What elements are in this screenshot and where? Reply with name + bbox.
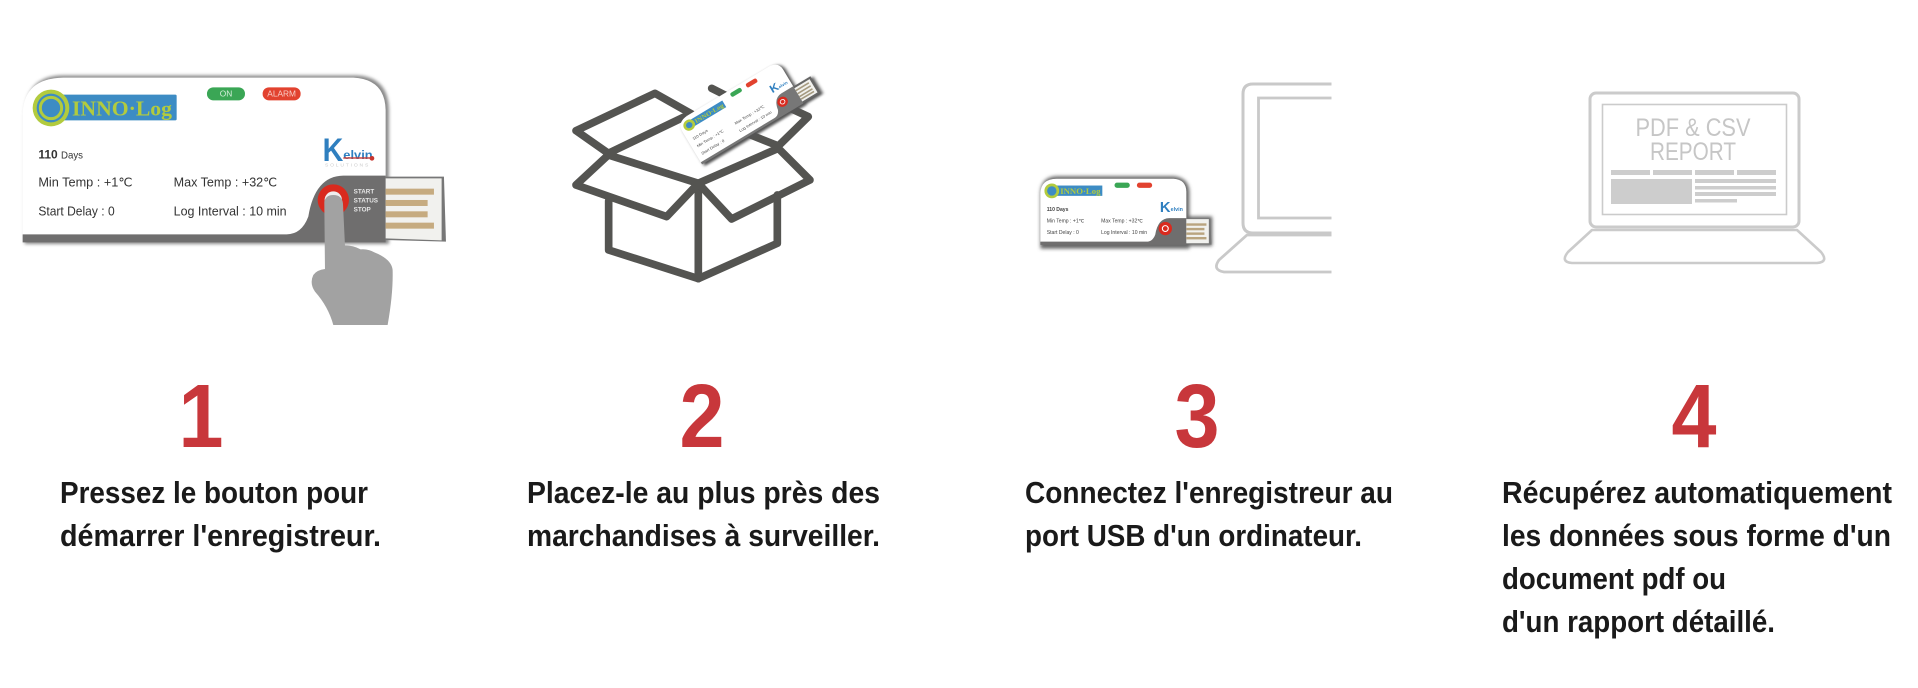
icon: hand — [312, 195, 393, 325]
step 2 number: 2 — [680, 367, 724, 467]
step 3 text: port USB d'un ordinateur. — [1025, 518, 1362, 553]
logger card, tilted: INNO·Log — [694, 102, 726, 125]
Kelvin logo: SOLUTIONS — [325, 163, 369, 169]
logger card: Log Interval : 10 min — [1101, 230, 1147, 236]
panel: step 3 illustration, logger and laptop — [1040, 84, 1332, 272]
step 4 text: Récupérez automatiquement — [1502, 475, 1892, 510]
step 1 number: 1 — [178, 367, 224, 467]
logger settings text: 110 Days — [38, 147, 83, 161]
logger settings text: Log Interval : 10 min — [174, 205, 287, 219]
step 4 number: 4 — [1672, 367, 1716, 467]
ON indicator: ON — [220, 89, 232, 99]
icon: cardboard box — [576, 88, 810, 279]
logger settings text: Min Temp : +1℃ — [38, 176, 133, 190]
logger card, tilted: K — [768, 81, 782, 96]
logger card — [1040, 176, 1212, 249]
step 3 number: 3 — [1174, 367, 1220, 467]
panel: step 2 illustration, open box with logger — [576, 50, 824, 279]
logger settings text: Max Temp : +32℃ — [174, 176, 277, 190]
panel: step 4 illustration, laptop with report — [1565, 93, 1824, 263]
icon: laptop — [1565, 93, 1824, 263]
power button — [318, 184, 349, 216]
logo — [33, 90, 177, 126]
logger card: INNO·Log — [1060, 187, 1101, 196]
logger card, tilted: elvin — [778, 80, 789, 89]
logger card, tilted — [677, 50, 824, 167]
Kelvin logo — [323, 132, 374, 169]
report title: PDF & CSV — [1636, 114, 1751, 142]
logger settings text: Start Delay : 0 — [38, 205, 115, 219]
ALARM indicator — [263, 87, 301, 100]
ON indicator — [207, 87, 245, 100]
step 4 text: document pdf ou — [1502, 561, 1726, 596]
logger card, tilted: Start Delay : 0 — [700, 138, 726, 156]
step 3 text: Connectez l'enregistreur au — [1025, 475, 1393, 510]
report title: REPORT — [1650, 138, 1736, 166]
Kelvin logo: K — [323, 132, 343, 168]
logger card: 110 Days — [1047, 207, 1069, 213]
card shadow — [25, 75, 389, 244]
step 4 text: les données sous forme d'un — [1502, 518, 1891, 553]
logger card, tilted: Max Temp : +32℃ — [734, 104, 766, 126]
step 1 text: démarrer l'enregistreur. — [60, 518, 381, 553]
report content blocks — [1611, 170, 1776, 204]
logger card, tilted: 110 Days — [691, 128, 709, 141]
button labels — [354, 188, 378, 214]
step 4 text: d'un rapport détaillé. — [1502, 604, 1775, 639]
report title — [1636, 114, 1751, 166]
logger card: elvin — [1171, 207, 1183, 213]
logo: INNO·Log — [72, 98, 173, 120]
button labels: START — [354, 188, 374, 195]
panel: step 1 illustration, logger with pressing finger — [23, 75, 446, 325]
logger card, tilted: Min Temp : +1℃ — [696, 128, 725, 148]
ALARM indicator: ALARM — [267, 89, 296, 99]
logger card: Start Delay : 0 — [1047, 230, 1079, 236]
step 1 text: Pressez le bouton pour — [60, 475, 368, 510]
logger settings text — [38, 147, 287, 219]
step 2 text: marchandises à surveiller. — [527, 518, 880, 553]
logger card, tilted: Log Interval : 10 min — [738, 110, 773, 133]
Kelvin logo: elvin — [343, 149, 373, 162]
logger card: Min Temp : +1℃ — [1047, 219, 1085, 225]
grey card band — [23, 176, 386, 242]
button labels: STOP — [354, 207, 371, 214]
USB connector — [386, 177, 446, 242]
button labels: STATUS — [354, 198, 378, 205]
logger card: K — [1160, 200, 1171, 216]
icon: laptop, clipped at right — [1216, 84, 1332, 272]
step 2 text: Placez-le au plus près des — [527, 475, 880, 510]
logger card: Max Temp : +32℃ — [1101, 219, 1143, 225]
logger card body — [23, 78, 386, 237]
